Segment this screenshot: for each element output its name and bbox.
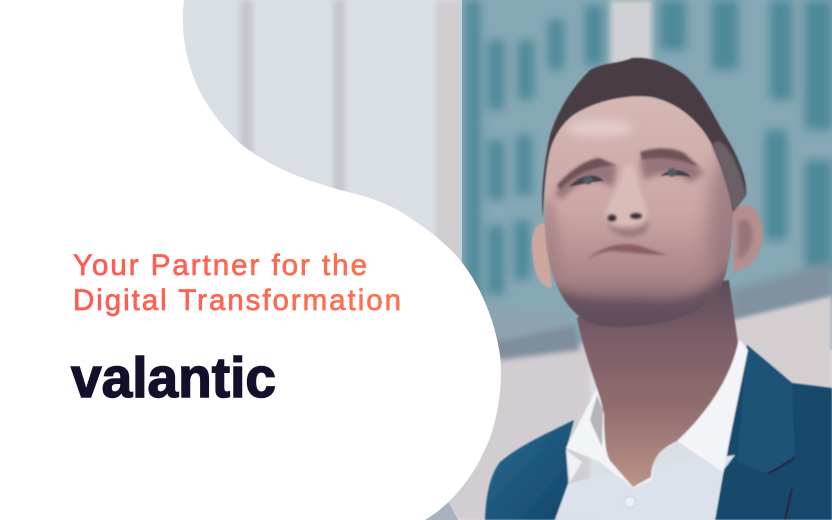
nose — [605, 165, 647, 226]
headline line 2: Digital Transformation — [73, 284, 401, 317]
hair highlight at temple — [712, 141, 746, 212]
white organic blob panel — [0, 0, 501, 520]
neck — [577, 280, 738, 487]
hair — [542, 58, 746, 218]
brow shadows — [555, 164, 617, 200]
eyebrows — [557, 158, 617, 190]
mouth — [587, 244, 668, 260]
valantic logo: valantic — [71, 346, 276, 410]
photo: man in front of blurred office building — [182, 0, 832, 520]
figure — [485, 58, 832, 520]
head — [543, 95, 734, 327]
headline line 1: Your Partner for the — [73, 249, 367, 282]
jacket — [485, 345, 832, 520]
headline — [73, 249, 401, 317]
eyes — [569, 175, 604, 187]
ears — [532, 205, 763, 288]
shirt and collar — [555, 340, 748, 520]
